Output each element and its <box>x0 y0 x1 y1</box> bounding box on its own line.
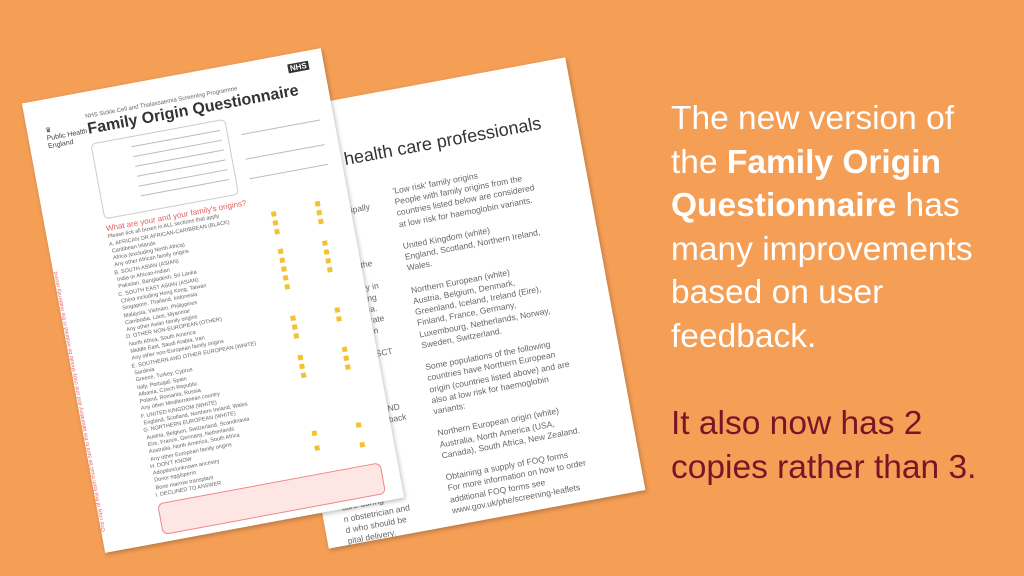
left column text: . More information <box>310 325 379 348</box>
left column text: n obstetrician and <box>343 502 411 524</box>
left column text: oth the woman AND <box>324 401 401 425</box>
main message text: Questionnaire has <box>671 187 960 224</box>
questions list: Albania, Czech Republic <box>138 381 198 398</box>
questions list: Sardinia <box>134 367 155 376</box>
NHS logo: NHS <box>289 61 307 73</box>
questions list <box>105 198 257 499</box>
left column text: esults, particularly in <box>302 280 379 304</box>
left column text: oratories' on <box>316 363 364 381</box>
logo: Public Health England <box>45 127 88 150</box>
right column text: Austria, Belgium, Denmark, <box>412 277 516 306</box>
questions list: Any other Mediterranean country <box>141 392 220 412</box>
questions list: Australia, North America, South Africa <box>149 433 240 455</box>
questions list: Middle East, Saudi Arabia, Iran <box>130 335 205 355</box>
right column text <box>392 170 587 515</box>
questions list: England, Scotland, Northern Ireland, Wales <box>143 401 248 427</box>
main message text: The new version of <box>671 100 954 137</box>
logo: Public Health England: Public Health <box>46 128 88 143</box>
right column text: at low risk for haemoglobin variants. <box>398 194 533 229</box>
questions list: Africa (excluding North Africa) <box>113 242 185 262</box>
left column text: ook. Search for 'SCT <box>314 346 393 370</box>
right column text: Northern European origin (white) <box>437 406 560 438</box>
main message text: feedback. <box>671 318 816 355</box>
questions list: D. OTHER NON-EUROPEAN (OTHER) <box>126 317 222 341</box>
left column text: elp with the <box>300 275 344 293</box>
right column text: Greenland, Iceland, Ireland (Eire), <box>414 284 542 317</box>
left column text: pital delivery. <box>347 527 397 546</box>
right column text: variants: <box>433 401 466 416</box>
right column text: Canada), South Africa, New Zealand. <box>441 425 581 460</box>
questions list: India or African-Indian <box>117 267 170 283</box>
questions list: G. NORTHERN EUROPEAN (WHITE) <box>143 411 236 434</box>
questions list: Any other non-European family origins <box>131 339 224 362</box>
questions list: Caribbean Islands <box>111 240 156 254</box>
front page: Family Origin Questionnaire <box>22 48 404 553</box>
right column text: People with family origins from the <box>394 174 523 207</box>
main message text: many improvements <box>671 231 973 268</box>
left column text: e cell disease <box>335 461 387 480</box>
main message text: based on user <box>671 274 883 311</box>
form title: NHS Sickle Cell and Thalassaemia Screening Programme <box>85 86 238 120</box>
questions list: Italy, Portugal, Spain <box>137 376 187 391</box>
questions list: H. DON'T KNOW <box>150 456 192 470</box>
left column text: re (FOQ) is principally <box>288 202 371 227</box>
right column text: additional FOQ forms see <box>449 477 546 504</box>
back page: guidance for health care professionals <box>249 57 645 549</box>
right column text: www.gov.uk/phe/screening-leaflets <box>451 482 581 515</box>
questions list: E. SOUTHERN AND OTHER EUROPEAN (WHITE) <box>131 341 257 370</box>
questions list: Malaysia, Vietnam, Philippines <box>123 300 198 319</box>
questions list: China including Hong Kong, Taiwan <box>121 283 207 305</box>
patient details box <box>90 119 239 219</box>
left column text: d who should be <box>345 514 407 535</box>
questions list: Pakistan, Bangladesh, Sri Lanka <box>118 270 197 290</box>
left column text: revalence areas the <box>298 258 373 282</box>
questions list: Singapore, Thailand, Indonesia <box>122 292 198 312</box>
left column text: beta thalassaemia. <box>306 303 378 326</box>
left column text: ical father going back <box>326 411 407 436</box>
right column text: origin (countries listed above) and are <box>429 358 570 394</box>
questions list: Bone marrow transplant <box>155 475 214 491</box>
right column text: 'Low risk' family origins <box>392 170 479 196</box>
right column text: Some populations of the following <box>424 339 551 372</box>
heading: ce for health care professionals <box>293 113 543 178</box>
left column text <box>286 195 411 546</box>
right column text: Luxembourg, Netherlands, Norway, <box>418 305 551 339</box>
left column text: haemoglobin <box>292 230 341 249</box>
questions list: Eire, France, Germany, Netherlands <box>147 426 235 448</box>
right column text: Sweden, Switzerland. <box>420 325 503 350</box>
declaration red box <box>157 462 386 535</box>
questions list: North Africa, South America <box>129 330 196 348</box>
questions list: Any other European family origins <box>150 442 232 463</box>
right column text: also at low risk for haemoglobin <box>431 374 549 405</box>
right column text: Northern European (white) <box>410 267 510 295</box>
right column text: United Kingdom (white) <box>402 225 491 251</box>
logo: Public Health England: ♛ <box>45 127 52 135</box>
logo: Public Health England: England <box>48 139 74 150</box>
secondary message text: It also now has 2 <box>671 405 922 442</box>
questions list: Cambodia, Laos, Myanmar <box>125 308 191 326</box>
left column text: of results indicating <box>304 292 377 315</box>
front page: Family Origin Questionnaire: Family Origin Questionnaire <box>86 82 300 138</box>
right column text: Wales. <box>406 259 433 273</box>
left column text: found in the <box>312 341 358 359</box>
questions list: B. SOUTH ASIAN (ASIAN) <box>114 258 179 276</box>
left column text: s useful for accurate <box>308 313 385 337</box>
right column text: Finland, France, Germany, <box>416 300 517 328</box>
right column text: England, Scotland, Northern Ireland, <box>404 227 541 262</box>
left column text: ons (or more if <box>328 427 384 447</box>
red vertical note: One copy of this form must be sent to the laboratory and one copy should be retained in the maternity record. <box>53 270 107 532</box>
left column text: ed to ask for the <box>322 393 384 414</box>
tick boxes <box>271 211 277 217</box>
right column text: countries listed below are considered <box>396 183 535 218</box>
questions list: A. AFRICAN OR AFRICAN-CARIBBEAN (BLACK) <box>109 219 230 248</box>
secondary message text: copies rather than 3. <box>671 449 976 486</box>
questions list: I. DECLINED TO ANSWER <box>155 481 222 499</box>
left column text: sease, who will <box>339 482 397 502</box>
questions list: Any other Asian family origins <box>126 314 198 333</box>
questions list: F. UNITED KINGDOM (WHITE) <box>140 400 217 420</box>
right column text: For more information on how to order <box>447 458 587 493</box>
right column text: Australia, North America (USA, <box>439 418 555 449</box>
questions list: Austria, Belgium, Switzerland, Scandinavia <box>146 416 250 441</box>
questions list: Poland, Romania, Russia <box>139 388 201 405</box>
questions list: Donor egg/sperm <box>154 470 197 484</box>
main message text: the Family Origin <box>671 144 941 181</box>
left column text: areas the family <box>286 195 346 216</box>
questions list: C. SOUTH EAST ASIAN (ASIAN) <box>118 277 199 298</box>
left column text: omen who are at <box>290 216 354 238</box>
questions list: Greece, Turkey, Cyprus <box>135 367 193 384</box>
main message text <box>671 100 973 355</box>
questions list: Any other African family origins <box>114 249 189 269</box>
questions list: What are your and your family's origins? <box>105 198 247 233</box>
left column text: care during <box>341 495 384 513</box>
right column text: Obtaining a supply of FOQ forms <box>445 450 569 482</box>
questions list: Adoption/unknown ancestry <box>153 459 220 477</box>
right column text: countries have Northern European <box>426 350 556 383</box>
questions list: Please tick all boxes in ALL sections that apply <box>107 214 220 240</box>
secondary message text <box>671 405 976 486</box>
left column text: o identify women <box>337 470 401 491</box>
